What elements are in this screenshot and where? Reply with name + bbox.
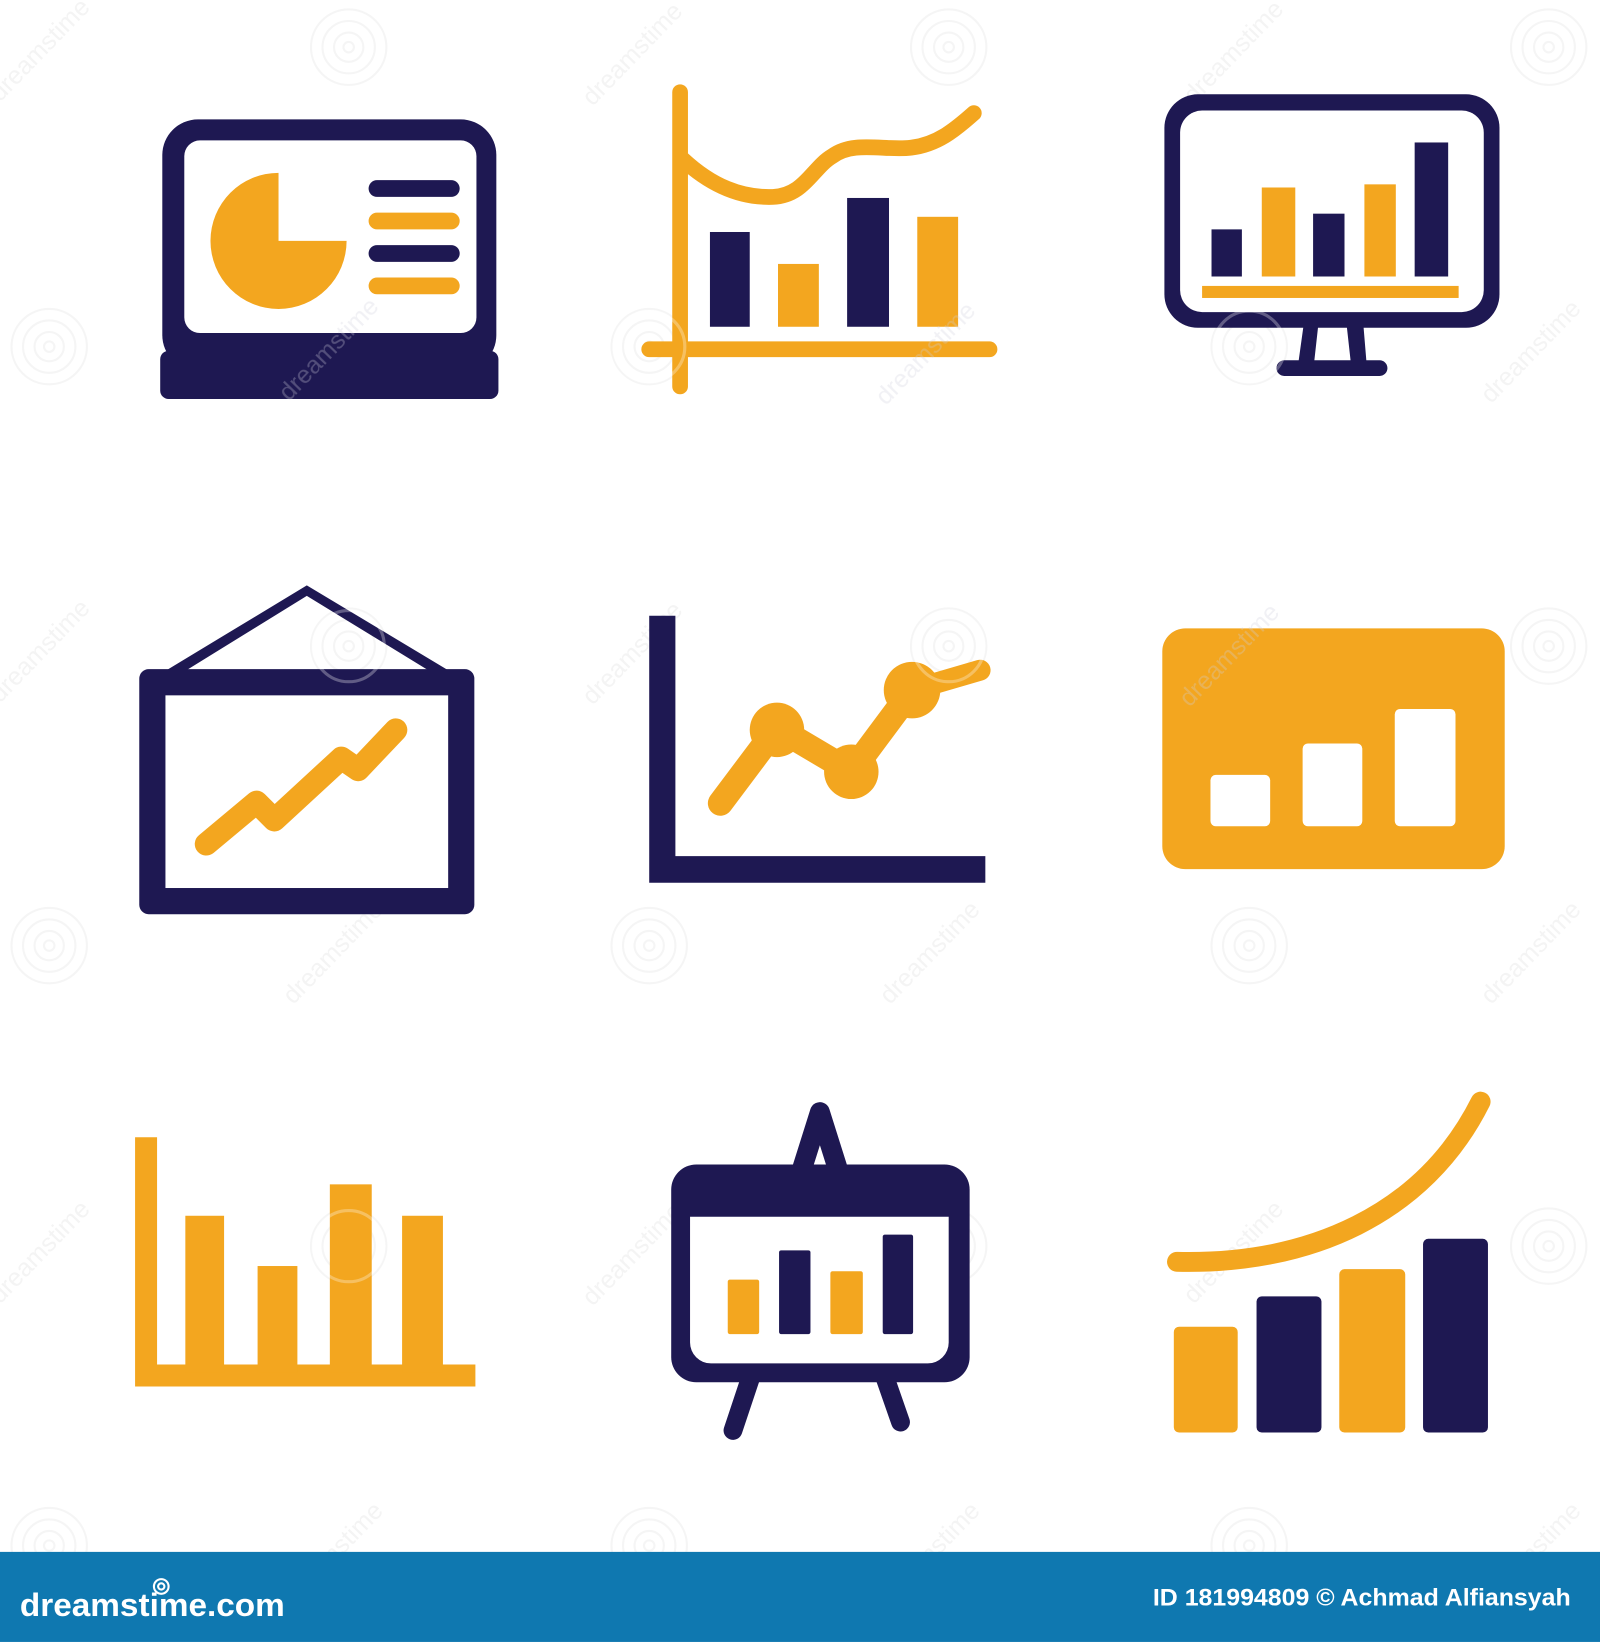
icon: laptop with pie chart xyxy=(160,119,498,399)
footer banner xyxy=(0,1552,1600,1642)
watermark text: dreamstime xyxy=(874,896,986,1009)
watermark text: dreamstime xyxy=(577,1197,688,1311)
image credit: ID 181994809 © Achmad Alfiansyah xyxy=(1153,1584,1571,1611)
icon: orange card with bars xyxy=(1162,628,1505,869)
watermark text: dreamstime xyxy=(874,1497,986,1611)
watermark text: dreamstime xyxy=(1475,1497,1587,1611)
icon: growth bars with curve xyxy=(1174,1102,1488,1433)
logo wordmark: dreamstime.com xyxy=(20,1587,285,1623)
icon: desktop monitor with bars xyxy=(1164,94,1499,376)
watermark text: dreamstime xyxy=(1475,896,1587,1009)
faint watermark overlay on icons xyxy=(273,292,1285,1282)
faint watermark overlay on icons: dreamstime xyxy=(870,297,981,411)
icon: presentation easel xyxy=(671,1112,970,1430)
watermark text: dreamstime xyxy=(1178,1195,1289,1309)
icon: line chart with axes xyxy=(649,616,985,883)
logo spiral xyxy=(154,1579,169,1594)
watermark text: dreamstime xyxy=(277,896,389,1009)
watermark text: dreamstime xyxy=(1475,295,1587,408)
icon: bar chart with trend curve xyxy=(649,92,990,386)
faint watermark overlay on icons: dreamstime xyxy=(273,292,384,406)
watermark text: dreamstime xyxy=(577,0,688,111)
watermark text: dreamstime xyxy=(277,1497,389,1611)
watermark text: dreamstime xyxy=(577,596,688,710)
icon: orange bar chart xyxy=(135,1137,475,1386)
faint watermark overlay on icons: dreamstime xyxy=(1174,598,1285,712)
icon: hanging board with rising line xyxy=(139,585,474,914)
